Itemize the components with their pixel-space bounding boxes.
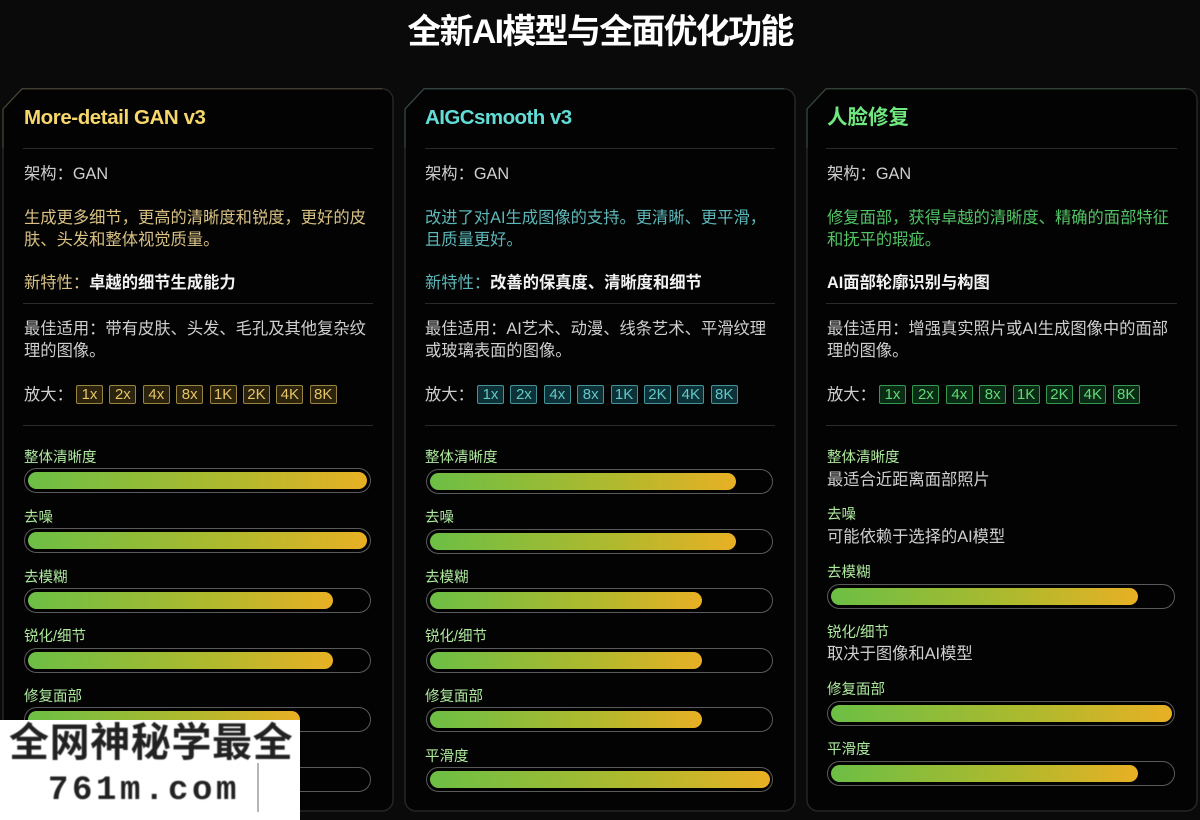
metric label: denoise: 去噪 [24, 510, 53, 526]
upscale tags: 2x [516, 386, 532, 403]
best for: 最佳适用：增强真实照片或AI生成图像中的面部 [827, 320, 1168, 338]
metric label: overall clarity: 整体清晰度 [827, 450, 900, 466]
metric label: deblur: 去模糊 [24, 570, 68, 586]
metric label: sharpen: 锐化/细节 [24, 629, 86, 645]
metric label: overall clarity: 整体清晰度 [425, 450, 498, 466]
best for: 或玻璃表面的图像。 [425, 342, 572, 360]
bar: smoothness [24, 767, 371, 792]
upscale tags: 4x [549, 386, 565, 403]
metric label: smoothness: 平滑度 [425, 749, 468, 765]
architecture: 架构：GAN [827, 165, 911, 183]
upscale tags: 1K [214, 386, 232, 403]
description [425, 209, 766, 249]
description: 生成更多细节，更高的清晰度和锐度，更好的皮 [24, 209, 366, 227]
bar: face restore [426, 707, 773, 732]
metric label: denoise: 去噪 [827, 507, 856, 523]
metric label: face restore: 修复面部 [24, 689, 82, 705]
upscale tags: 8x [985, 386, 1001, 403]
bar: denoise [426, 529, 773, 554]
bar: denoise [24, 528, 371, 553]
bar: deblur [24, 588, 371, 613]
metric label: deblur: 去模糊 [827, 565, 870, 581]
upscale tags: 8K [314, 386, 332, 403]
bar: sharpen [24, 648, 371, 673]
upscale tags [879, 385, 1140, 404]
metric label: face restore: 修复面部 [425, 689, 483, 705]
architecture: 架构：GAN [425, 165, 509, 183]
metric label: deblur: 去模糊 [425, 570, 468, 586]
upscale tags: 8K [715, 386, 733, 403]
bar: deblur [827, 584, 1175, 609]
bar: deblur [426, 588, 773, 613]
best for [425, 320, 766, 360]
upscale tags: 4K [1084, 386, 1102, 403]
description: 修复面部，获得卓越的清晰度、精确的面部特征 [827, 209, 1169, 227]
upscale tags: 4x [148, 386, 164, 403]
description: 肤、头发和整体视觉质量。 [24, 231, 219, 249]
watermark line 2: 761m.com [48, 772, 240, 810]
panel: More-detail GAN v3 [2, 88, 394, 812]
upscale tags: 1x [82, 386, 97, 403]
best for: 理的图像。 [827, 342, 908, 360]
best for [827, 320, 1168, 360]
architecture: 架构：GAN [24, 165, 108, 183]
new feature: AI面部轮廓识别与构图 [827, 274, 990, 292]
bar: face restore [24, 707, 371, 732]
upscale tags: 2x [918, 386, 934, 403]
upscale label: 放大： [827, 386, 876, 404]
heading: AIGCsmooth v3 [425, 106, 572, 129]
panel: AIGCsmooth v3 [404, 88, 796, 812]
upscale label: 放大： [425, 386, 474, 404]
heading: 人脸修复 [827, 106, 909, 129]
new feature: 新特性：改善的保真度、清晰度和细节 [425, 274, 702, 292]
heading: More-detail GAN v3 [24, 106, 206, 129]
description [24, 209, 366, 249]
best for: 理的图像。 [24, 342, 105, 360]
upscale tags: 4K [682, 386, 700, 403]
metric note: denoise: 可能依赖于选择的AI模型 [827, 528, 1005, 546]
bar: smoothness [426, 767, 773, 792]
panel: face restoration [806, 88, 1198, 812]
upscale tags: 4K [281, 386, 299, 403]
upscale tags: 2K [648, 386, 667, 403]
upscale tags [76, 385, 337, 404]
upscale tags [477, 385, 738, 404]
best for: 最佳适用：AI艺术、动漫、线条艺术、平滑纹理 [425, 320, 766, 338]
bar: overall clarity [24, 468, 371, 493]
upscale label: 放大： [24, 386, 73, 404]
bar: face restore [827, 701, 1175, 726]
upscale tags: 8x [182, 386, 198, 403]
watermark line 1: 全网神秘学最全 [9, 721, 293, 765]
upscale tags: 2K [247, 386, 266, 403]
best for [24, 320, 366, 360]
upscale tags: 1x [885, 386, 900, 403]
bar: sharpen [426, 648, 773, 673]
upscale tags: 1x [483, 386, 498, 403]
description: 和抚平的瑕疵。 [827, 231, 941, 249]
upscale tags: 1K [1017, 386, 1035, 403]
upscale tags: 2x [115, 386, 131, 403]
metric note: sharpen: 取决于图像和AI模型 [827, 645, 973, 663]
description [827, 209, 1169, 249]
upscale tags: 8K [1117, 386, 1135, 403]
upscale tags: 4x [951, 386, 967, 403]
description: 改进了对AI生成图像的支持。更清晰、更平滑， [425, 209, 766, 227]
metric label: sharpen: 锐化/细节 [827, 625, 889, 641]
bar: overall clarity [426, 469, 773, 494]
upscale tags: 2K [1050, 386, 1069, 403]
metric label: sharpen: 锐化/细节 [425, 629, 487, 645]
metric label: smoothness: 平滑度 [827, 742, 870, 758]
upscale tags: 8x [583, 386, 599, 403]
description: 且质量更好。 [425, 231, 523, 249]
metric label: overall clarity: 整体清晰度 [24, 450, 96, 466]
title: 全新AI模型与全面优化功能 [407, 13, 793, 51]
bar: smoothness [827, 761, 1175, 786]
new feature: 新特性：卓越的细节生成能力 [24, 274, 236, 292]
watermark [0, 720, 300, 820]
best for: 最佳适用：带有皮肤、头发、毛孔及其他复杂纹 [24, 320, 366, 338]
metric label: face restore: 修复面部 [827, 682, 885, 698]
metric label: denoise: 去噪 [425, 510, 454, 526]
metric note: overall clarity: 最适合近距离面部照片 [827, 471, 990, 489]
upscale tags: 1K [615, 386, 633, 403]
